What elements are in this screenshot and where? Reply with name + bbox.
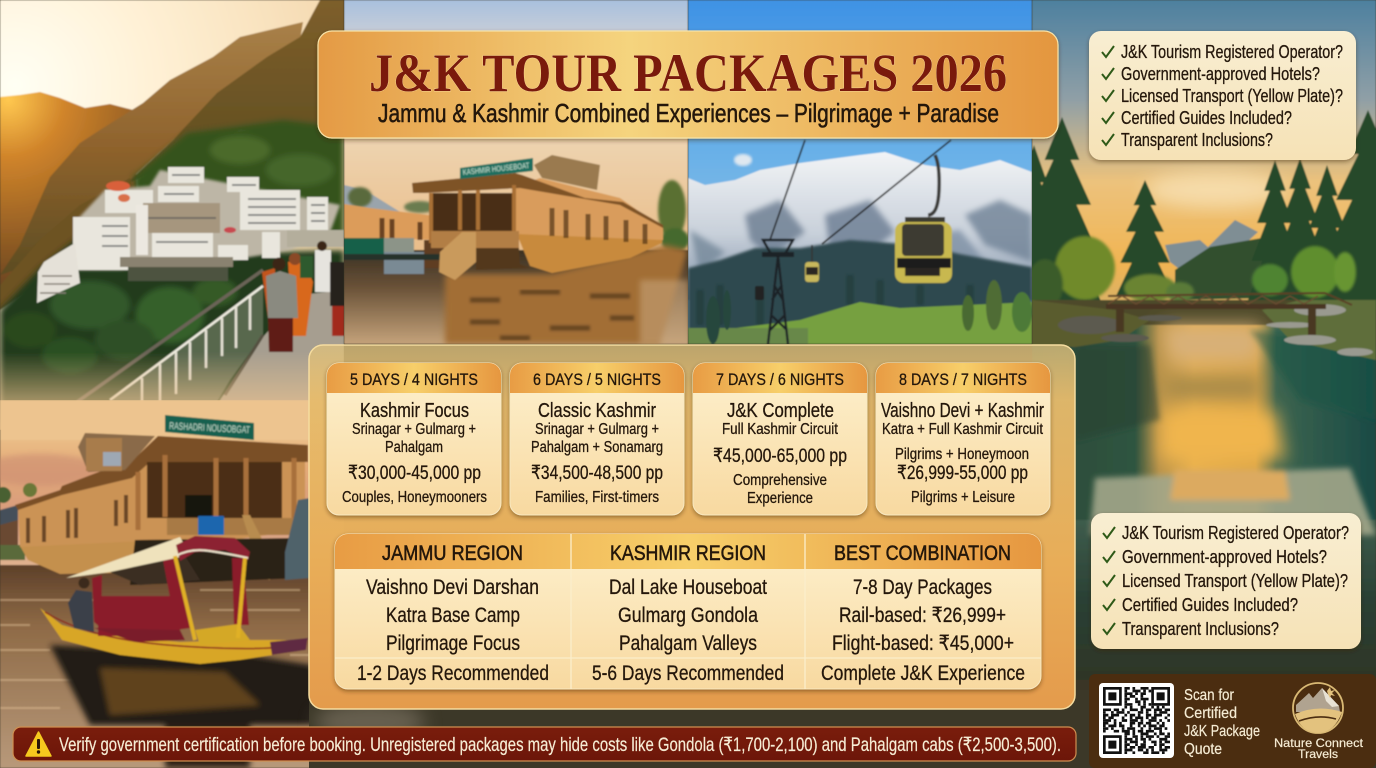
table column: Jammu region: JAMMU REGION — [382, 542, 523, 565]
package card: 7 days: J&K Complete — [727, 400, 834, 422]
package card: 6 days — [510, 363, 684, 515]
table column: best combination: 7-8 Day Packages — [853, 576, 992, 599]
table column: Kashmir region: KASHMIR REGION — [610, 542, 766, 565]
table column: Kashmir region: Gulmarg Gondola — [618, 604, 758, 627]
package card: 5 days: Kashmir Focus — [360, 400, 469, 422]
warning banner — [13, 727, 1076, 761]
floating houseboat — [412, 155, 663, 280]
table column: Kashmir region: Pahalgam Valleys — [619, 632, 757, 655]
warning text: Verify government certification before booking. Unregistered packages may hide costs like Gondola (₹1,700-2,100) and Pahalgam cabs (₹2,500-3,500). — [59, 734, 1061, 756]
panel: certification checklist bottom: Transparent Inclusions? — [1122, 619, 1279, 639]
package card: 6 days: Srinagar + Gulmarg + — [535, 421, 659, 438]
subtitle: Jammu & Kashmir Combined Experiences – Pilgrimage + Paradise — [378, 98, 999, 128]
houseboat name sign — [165, 415, 254, 440]
panel: certification checklist top: Government-approved Hotels? — [1121, 64, 1320, 84]
panel: certification checklist bottom: Certified Guides Included? — [1122, 595, 1298, 615]
panel: packages and regions — [309, 345, 1075, 709]
title banner — [318, 31, 1058, 138]
houseboat sign: KASHMIR HOUSEBOAT — [462, 161, 530, 177]
package card: 5 days: Srinagar + Gulmarg + — [352, 421, 476, 438]
package card: 8 days: Pilgrims + Honeymoon — [895, 446, 1029, 463]
panel: certification checklist top: Certified Guides Included? — [1121, 108, 1292, 128]
table column: Kashmir region: 5-6 Days Recommended — [592, 662, 784, 685]
photo: houseboat on lake — [344, 0, 689, 344]
table column: best combination: Rail-based: ₹26,999+ — [839, 604, 1006, 627]
icon: warning triangle — [26, 732, 51, 756]
houseboat name sign: RASHADRI NOUSOBGAT — [169, 421, 250, 436]
QR caption: J&K Package — [1184, 723, 1260, 740]
package card: 6 days: ₹34,500-48,500 pp — [531, 462, 663, 484]
cableway tower and cables — [755, 140, 951, 344]
river banks and stones — [1032, 300, 1376, 360]
package card: 5 days: Couples, Honeymooners — [342, 489, 487, 506]
table column: Jammu region: Katra Base Camp — [386, 604, 520, 627]
blue plaque — [198, 516, 224, 535]
package card: 7 days: 7 DAYS / 6 NIGHTS — [716, 370, 844, 389]
QR caption: Scan for — [1184, 687, 1235, 704]
table column: Jammu region: 1-2 Days Recommended — [357, 662, 549, 685]
table column: best combination: Complete J&K Experience — [821, 662, 1025, 685]
photo: houseboat and shikara on Dal Lake — [0, 400, 309, 768]
houseboat — [15, 433, 310, 585]
region comparison table — [335, 534, 1041, 689]
package card: 6 days: Pahalgam + Sonamarg — [531, 439, 663, 456]
QR caption: Quote — [1184, 741, 1222, 758]
panel: certification checklist bottom: Government-approved Hotels? — [1122, 547, 1327, 567]
panel: certification checklist top — [1089, 31, 1356, 160]
brand logo: Nature Connect Travels: Nature Connect — [1274, 738, 1364, 750]
table column: best combination: Flight-based: ₹45,000+ — [832, 632, 1014, 655]
package card: 5 days: ₹30,000-45,000 pp — [348, 462, 481, 484]
package card: 7 days — [693, 363, 867, 515]
table column: best combination: BEST COMBINATION — [834, 542, 1011, 565]
lake reflection — [50, 645, 318, 768]
package card: 8 days: Vaishno Devi + Kashmir — [881, 400, 1044, 422]
package card: 7 days: Experience — [747, 490, 813, 507]
package card: 8 days: Katra + Full Kashmir Circuit — [882, 421, 1043, 438]
package card: 7 days: ₹45,000-65,000 pp — [713, 445, 847, 467]
photo: Vaishno Devi shrine on mountainside — [0, 0, 344, 430]
QR caption: Certified — [1184, 705, 1237, 722]
table column: Jammu region — [357, 542, 549, 685]
package card: 6 days: Families, First-timers — [535, 489, 659, 506]
houseboat sign — [460, 158, 533, 179]
package card: 8 days: Pilgrims + Leisure — [911, 489, 1015, 506]
panel: QR and brand footer — [1089, 674, 1376, 768]
brand logo: Nature Connect Travels — [1274, 683, 1364, 761]
walkway and railing — [220, 292, 344, 400]
shikara boat — [40, 536, 308, 664]
brand logo: Nature Connect Travels: Travels — [1298, 749, 1338, 761]
QR code — [1099, 683, 1174, 758]
package card: 7 days: Full Kashmir Circuit — [722, 421, 838, 438]
panel: certification checklist top: Transparent Inclusions? — [1121, 130, 1273, 150]
gondola cabin — [895, 155, 952, 283]
table column: Jammu region: Pilgrimage Focus — [386, 632, 520, 655]
shrine buildings — [37, 167, 344, 303]
table column: Kashmir region — [592, 542, 784, 685]
package card: 5 days: Pahalgam — [385, 439, 443, 456]
table column: best combination — [821, 542, 1025, 685]
QR caption — [1184, 687, 1260, 758]
dark strip beneath main panel — [309, 690, 1090, 768]
panel: certification checklist bottom — [1091, 513, 1361, 649]
table column: Jammu region: Vaishno Devi Darshan — [366, 576, 539, 599]
wooden bridge — [1106, 293, 1352, 335]
package card: 8 days: ₹26,999-55,000 pp — [897, 462, 1028, 484]
photo: river, pine forest and wooden bridge at sunset — [1001, 0, 1376, 680]
main title: J&K TOUR PACKAGES 2026 — [369, 43, 1007, 103]
photo: gondola over snow peaks — [688, 0, 1032, 344]
package card: 5 days — [327, 363, 501, 515]
package card: 8 days: 8 DAYS / 7 NIGHTS — [899, 370, 1027, 389]
table column: Kashmir region: Dal Lake Houseboat — [609, 576, 767, 599]
package card: 6 days: Classic Kashmir — [538, 400, 656, 422]
package card: 6 days: 6 DAYS / 5 NIGHTS — [533, 370, 661, 389]
pilgrims — [262, 241, 344, 352]
package card: 5 days: 5 DAYS / 4 NIGHTS — [350, 370, 478, 389]
package card: 8 days — [876, 363, 1050, 515]
package card: 7 days: Comprehensive — [733, 472, 827, 489]
